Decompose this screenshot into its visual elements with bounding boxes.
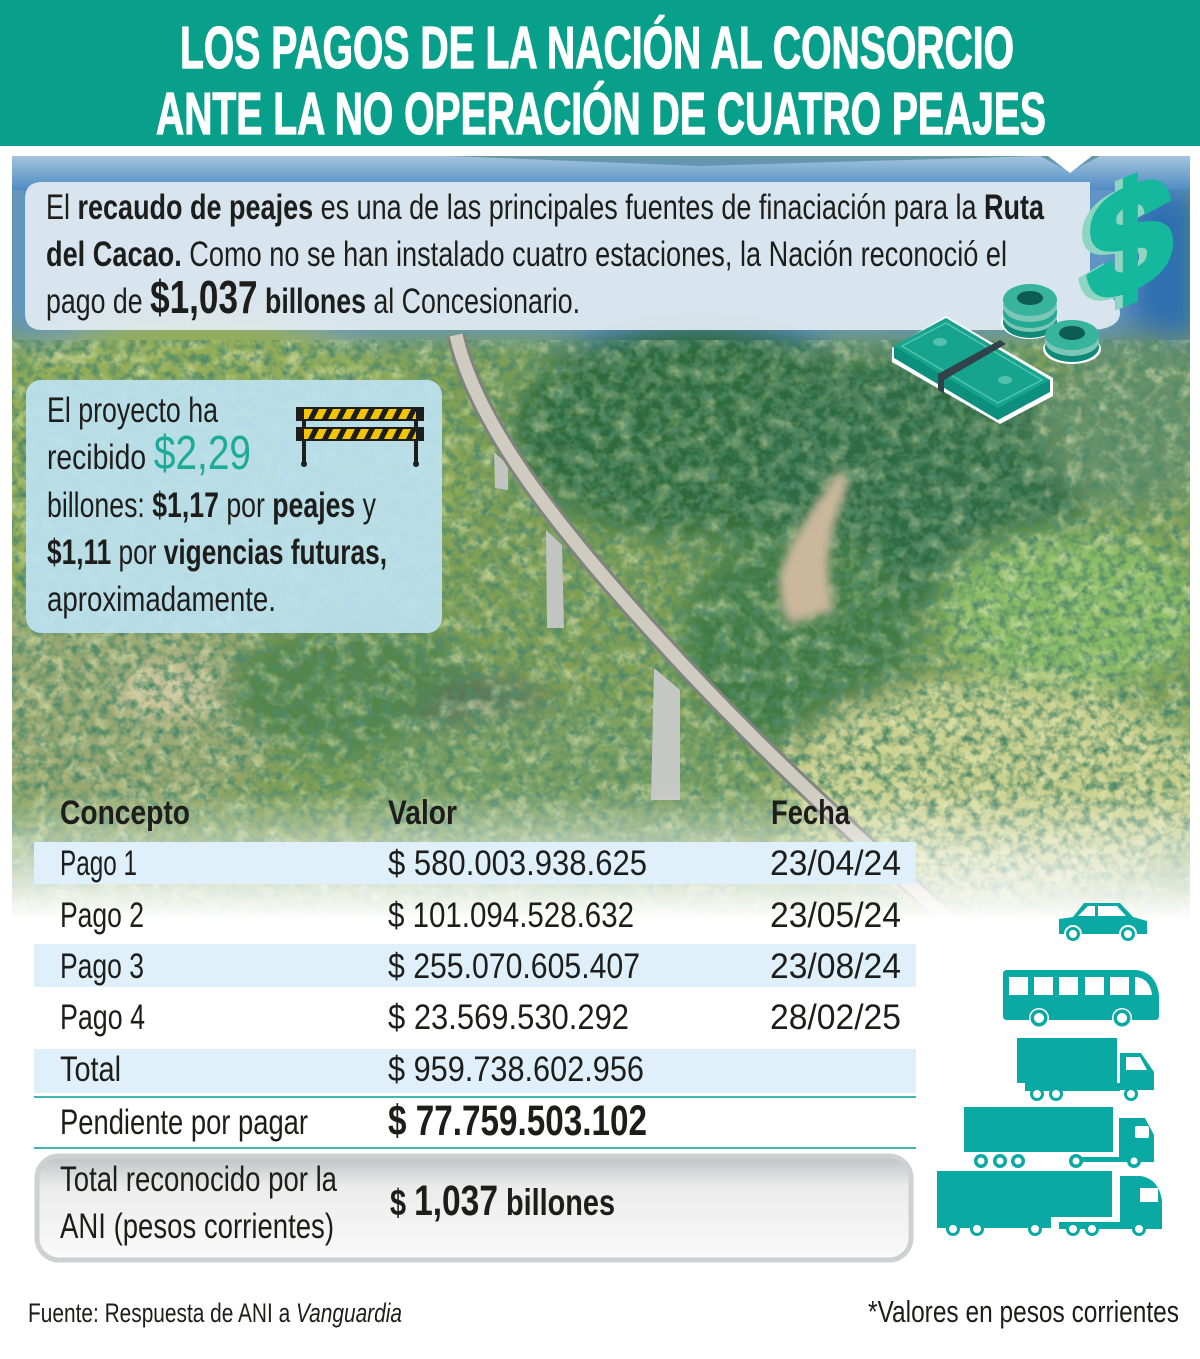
white fade into table	[0, 790, 1200, 920]
panel: project received	[26, 380, 442, 633]
text: billones: billones: $1,17 por peajes y	[47, 486, 376, 525]
row: total reconocido: $ 1,037 billones	[390, 1177, 615, 1225]
source note: Fuente: Respuesta de ANI a Vanguardia	[28, 1298, 402, 1328]
row: pago 3	[60, 947, 901, 986]
row: pago 2: 23/05/24	[770, 896, 901, 935]
table header: Concepto	[60, 794, 190, 832]
icon: car	[1059, 903, 1147, 943]
row: pendiente por pagar: $ 77.759.503.102	[388, 1097, 647, 1145]
row: total: $ 959.738.602.956	[388, 1050, 644, 1089]
text: el proyecto ha: El proyecto ha	[47, 391, 218, 430]
row: pendiente por pagar: Pendiente por pagar	[60, 1103, 308, 1142]
row: total: Total	[60, 1050, 121, 1089]
table header: Valor	[388, 794, 457, 832]
panel: intro text	[25, 182, 1120, 330]
intro line 3: pago de $1,037 billones al Concesionario.	[46, 271, 580, 323]
mountain ridges	[12, 156, 1190, 190]
table of payments	[34, 794, 916, 1260]
row: total reconocido	[37, 1156, 911, 1260]
row: pago 3: Pago 3	[60, 947, 144, 986]
title band	[0, 0, 1200, 147]
text: aproximadamente: aproximadamente.	[47, 580, 276, 619]
icon: truck with trailer	[964, 1107, 1154, 1168]
intro line 1: El recaudo de peajes es una de las principales fuentes de finaciación para la Ruta	[46, 188, 1044, 227]
row: pago 3: $ 255.070.605.407	[388, 947, 640, 986]
row: pago 2: Pago 2	[60, 896, 144, 935]
row: pago 1: Pago 1	[60, 844, 137, 883]
row: pago 1: 23/04/24	[770, 844, 901, 883]
row: pendiente por pagar	[60, 1097, 647, 1145]
row: total	[60, 1050, 644, 1089]
viaduct	[456, 335, 960, 930]
icon: large truck	[937, 1171, 1162, 1236]
icon: bus	[1003, 970, 1159, 1028]
icon: cash bundle	[892, 316, 1053, 424]
row: pago 3: 23/08/24	[770, 947, 901, 986]
row: pago 2	[60, 896, 901, 935]
row: pago 4: $ 23.569.530.292	[388, 998, 629, 1037]
icon: small truck	[1017, 1038, 1154, 1101]
row: pago 1: $ 580.003.938.625	[388, 844, 647, 883]
icon: coins	[1001, 284, 1101, 364]
row: pago 4: 28/02/25	[770, 998, 901, 1037]
background photo: aerial view of viaduct	[0, 150, 1200, 946]
row: pago 4: Pago 4	[60, 998, 145, 1037]
row: total reconocido: Total reconocido por la	[60, 1160, 337, 1199]
row: total reconocido: ANI (pesos corrientes)	[60, 1207, 334, 1246]
row: pago 4	[60, 998, 901, 1037]
row: pago 1	[60, 844, 901, 883]
table header	[60, 794, 851, 832]
icon: dollar sign: $	[1088, 139, 1172, 340]
row: pago 2: $ 101.094.528.632	[388, 896, 634, 935]
icon: dollar sign: $	[1080, 142, 1164, 343]
text: recibido $2,29: recibido $2,29	[47, 427, 251, 480]
river	[779, 470, 850, 625]
table header: Fecha	[771, 794, 851, 832]
table row bands	[34, 842, 916, 1149]
text: vigencias futuras: $1,11 por vigencias futuras,	[47, 533, 387, 572]
icon: road barrier	[296, 407, 424, 467]
